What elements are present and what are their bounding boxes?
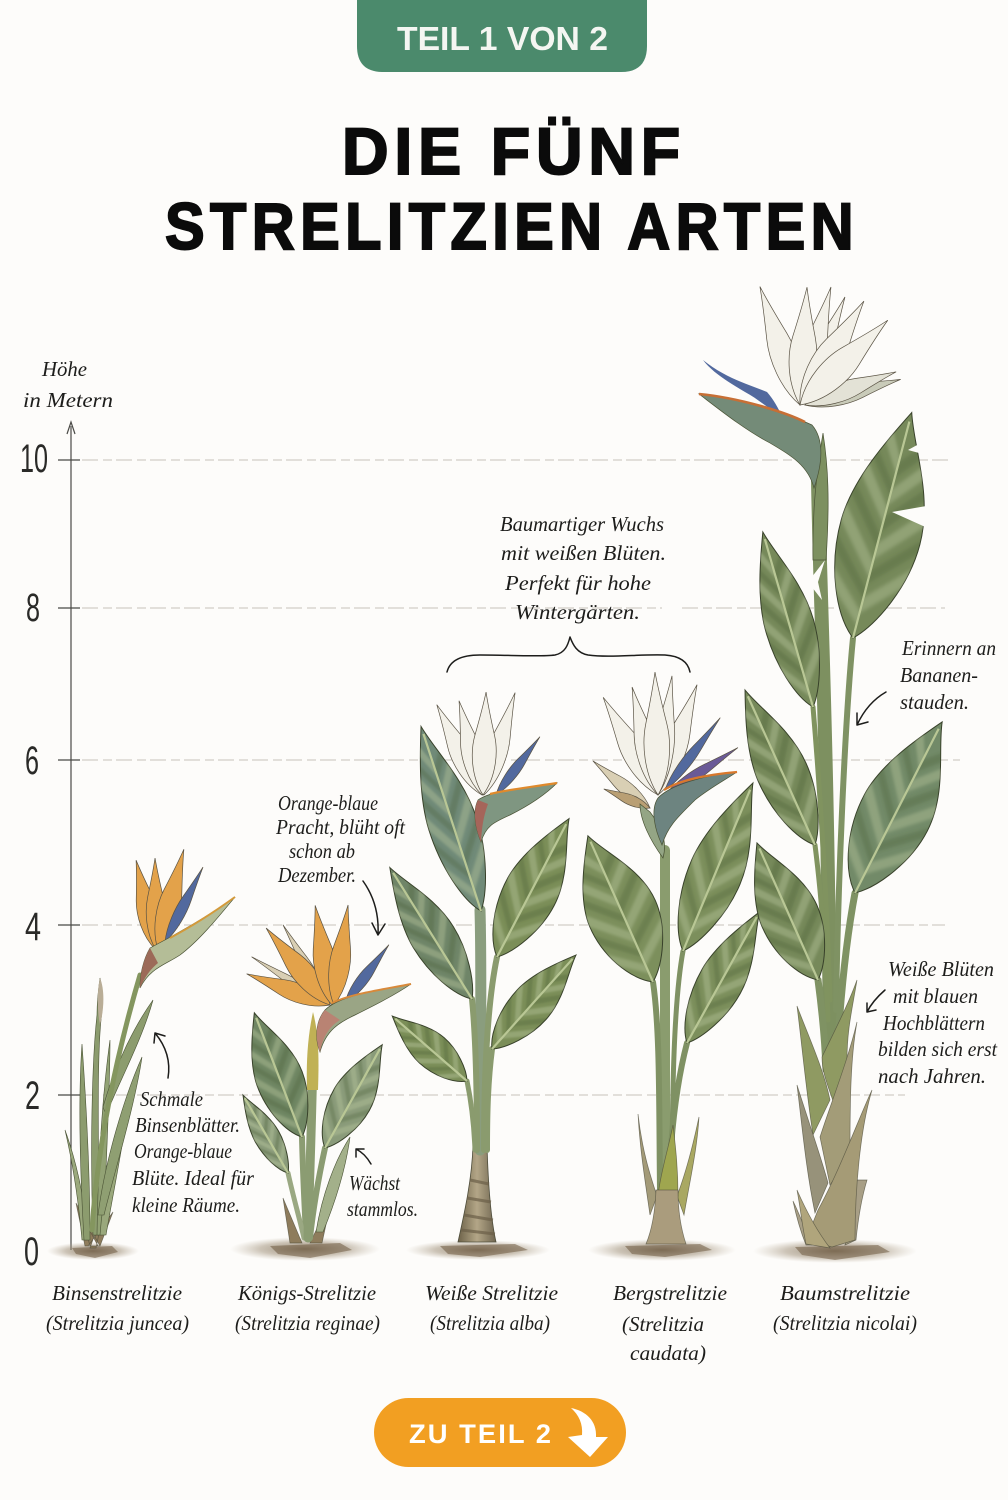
- leaf tears: [808, 438, 932, 600]
- species label: Binsenstrelitzie: [46, 1281, 189, 1335]
- axis label: in Metern: [23, 388, 113, 412]
- flower: orange and blue: [243, 904, 411, 1052]
- title: [165, 114, 859, 263]
- annotation: Schmale Binsenblätter: Schmale: [140, 1087, 203, 1111]
- annotation: Baumartiger Wuchs with brace: [447, 512, 690, 672]
- annotation: Erinnern an Bananenstauden: Bananen-: [900, 663, 978, 687]
- species label: Weiße Strelitzie: Weiße Strelitzie: [425, 1281, 558, 1305]
- annotation: Orange-blaue Pracht: Dezember.: [277, 863, 356, 887]
- annotation: Schmale Binsenblätter: Binsenblätter.: [135, 1113, 240, 1137]
- species label: Weiße Strelitzie: (Strelitzia alba): [430, 1311, 550, 1335]
- plant: Königs-Strelitzie: [230, 904, 411, 1261]
- annotation: Schmale Binsenblätter: Orange-blaue: [134, 1139, 232, 1163]
- species label: Bergstrelitzie: Bergstrelitzie: [613, 1281, 727, 1305]
- annotation: Wächst stammlos: Wächst: [349, 1171, 401, 1195]
- height axis with grid lines: [20, 422, 960, 1274]
- height axis with grid lines: 0: [24, 1230, 39, 1274]
- species label: Bergstrelitzie: [613, 1281, 727, 1365]
- height axis with grid lines: 10: [20, 437, 48, 481]
- annotation: Weiße Blüten: [867, 957, 998, 1088]
- species label: Königs-Strelitzie: Königs-Strelitzie: [237, 1281, 376, 1305]
- annotation: Weiße Blüten: nach Jahren.: [878, 1064, 986, 1088]
- annotation: Erinnern an Bananenstauden: stauden.: [900, 690, 969, 714]
- flower: white and blue: [427, 690, 557, 842]
- annotation: Schmale Binsenblätter: [132, 1033, 255, 1217]
- annotation: Weiße Blüten: bilden sich erst: [878, 1037, 998, 1061]
- annotation: Weiße Blüten: mit blauen: [893, 984, 978, 1008]
- species label: Binsenstrelitzie: Binsenstrelitzie: [52, 1281, 182, 1305]
- annotation: Wächst stammlos: stammlos.: [347, 1197, 418, 1221]
- height axis with grid lines: 4: [25, 905, 41, 949]
- annotation: Baumartiger Wuchs with brace: Wintergärten.: [515, 600, 640, 624]
- height axis with grid lines: 6: [25, 739, 39, 783]
- species label: Weiße Strelitzie: [425, 1281, 558, 1335]
- title: DIE FÜNF: [342, 114, 686, 188]
- annotation: Weiße Blüten: Hochblättern: [882, 1011, 985, 1035]
- annotation: Baumartiger Wuchs with brace: Baumartiger Wuchs: [500, 512, 664, 536]
- badge: Teil 1 von 2: [357, 0, 647, 72]
- species label: Baumstrelitzie: (Strelitzia nicolai): [773, 1311, 917, 1335]
- species label: Bergstrelitzie: (Strelitzia: [622, 1312, 704, 1336]
- plant: Baumstrelitzie: [699, 283, 975, 1263]
- flower: white and blue: [589, 672, 741, 858]
- badge: Teil 1 von 2: TEIL 1 VON 2: [397, 20, 608, 57]
- species label: Königs-Strelitzie: (Strelitzia reginae): [235, 1311, 380, 1335]
- species label: Binsenstrelitzie: (Strelitzia juncea): [46, 1311, 189, 1335]
- trunk: [458, 1145, 496, 1242]
- axis label: [23, 357, 113, 412]
- annotation: Weiße Blüten: Weiße Blüten: [888, 957, 994, 981]
- flower: white and blue: [699, 283, 903, 560]
- button: zu Teil 2: ZU TEIL 2: [409, 1419, 553, 1449]
- base sheaths: [638, 1114, 699, 1244]
- plant: Bergstrelitzie: [555, 672, 780, 1261]
- annotation: Orange-blaue Pracht: [275, 791, 406, 935]
- axis label: Höhe: [41, 357, 87, 381]
- height axis with grid lines: 2: [25, 1074, 40, 1118]
- species label: Königs-Strelitzie: [235, 1281, 380, 1335]
- plant: Binsenstrelitzie: [47, 847, 235, 1260]
- species label: Baumstrelitzie: Baumstrelitzie: [780, 1281, 910, 1305]
- annotation: Orange-blaue Pracht: schon ab: [289, 839, 355, 863]
- height axis with grid lines: 8: [26, 586, 40, 630]
- annotation: Baumartiger Wuchs with brace: mit weißen Blüten.: [501, 541, 666, 565]
- annotation: Baumartiger Wuchs with brace: Perfekt für hohe: [504, 571, 651, 595]
- annotation: Erinnern an Bananenstauden: [857, 636, 996, 725]
- plant: Weiße Strelitzie: [370, 690, 593, 1260]
- title: STRELITZIEN ARTEN: [165, 189, 859, 263]
- annotation: Schmale Binsenblätter: kleine Räume.: [132, 1193, 240, 1217]
- annotation: Schmale Binsenblätter: Blüte. Ideal für: [132, 1166, 255, 1190]
- annotation: Orange-blaue Pracht: Pracht, blüht oft: [275, 815, 406, 839]
- annotation: Orange-blaue Pracht: Orange-blaue: [278, 791, 378, 815]
- flower: orange and blue: [126, 847, 235, 988]
- annotation: Erinnern an Bananenstauden: Erinnern an: [901, 636, 996, 660]
- species label: Bergstrelitzie: caudata): [630, 1341, 706, 1365]
- button: zu Teil 2: [374, 1398, 626, 1467]
- annotation: Wächst stammlos: [347, 1149, 418, 1221]
- base sheaths: [793, 980, 872, 1248]
- species label: Baumstrelitzie: [773, 1281, 917, 1335]
